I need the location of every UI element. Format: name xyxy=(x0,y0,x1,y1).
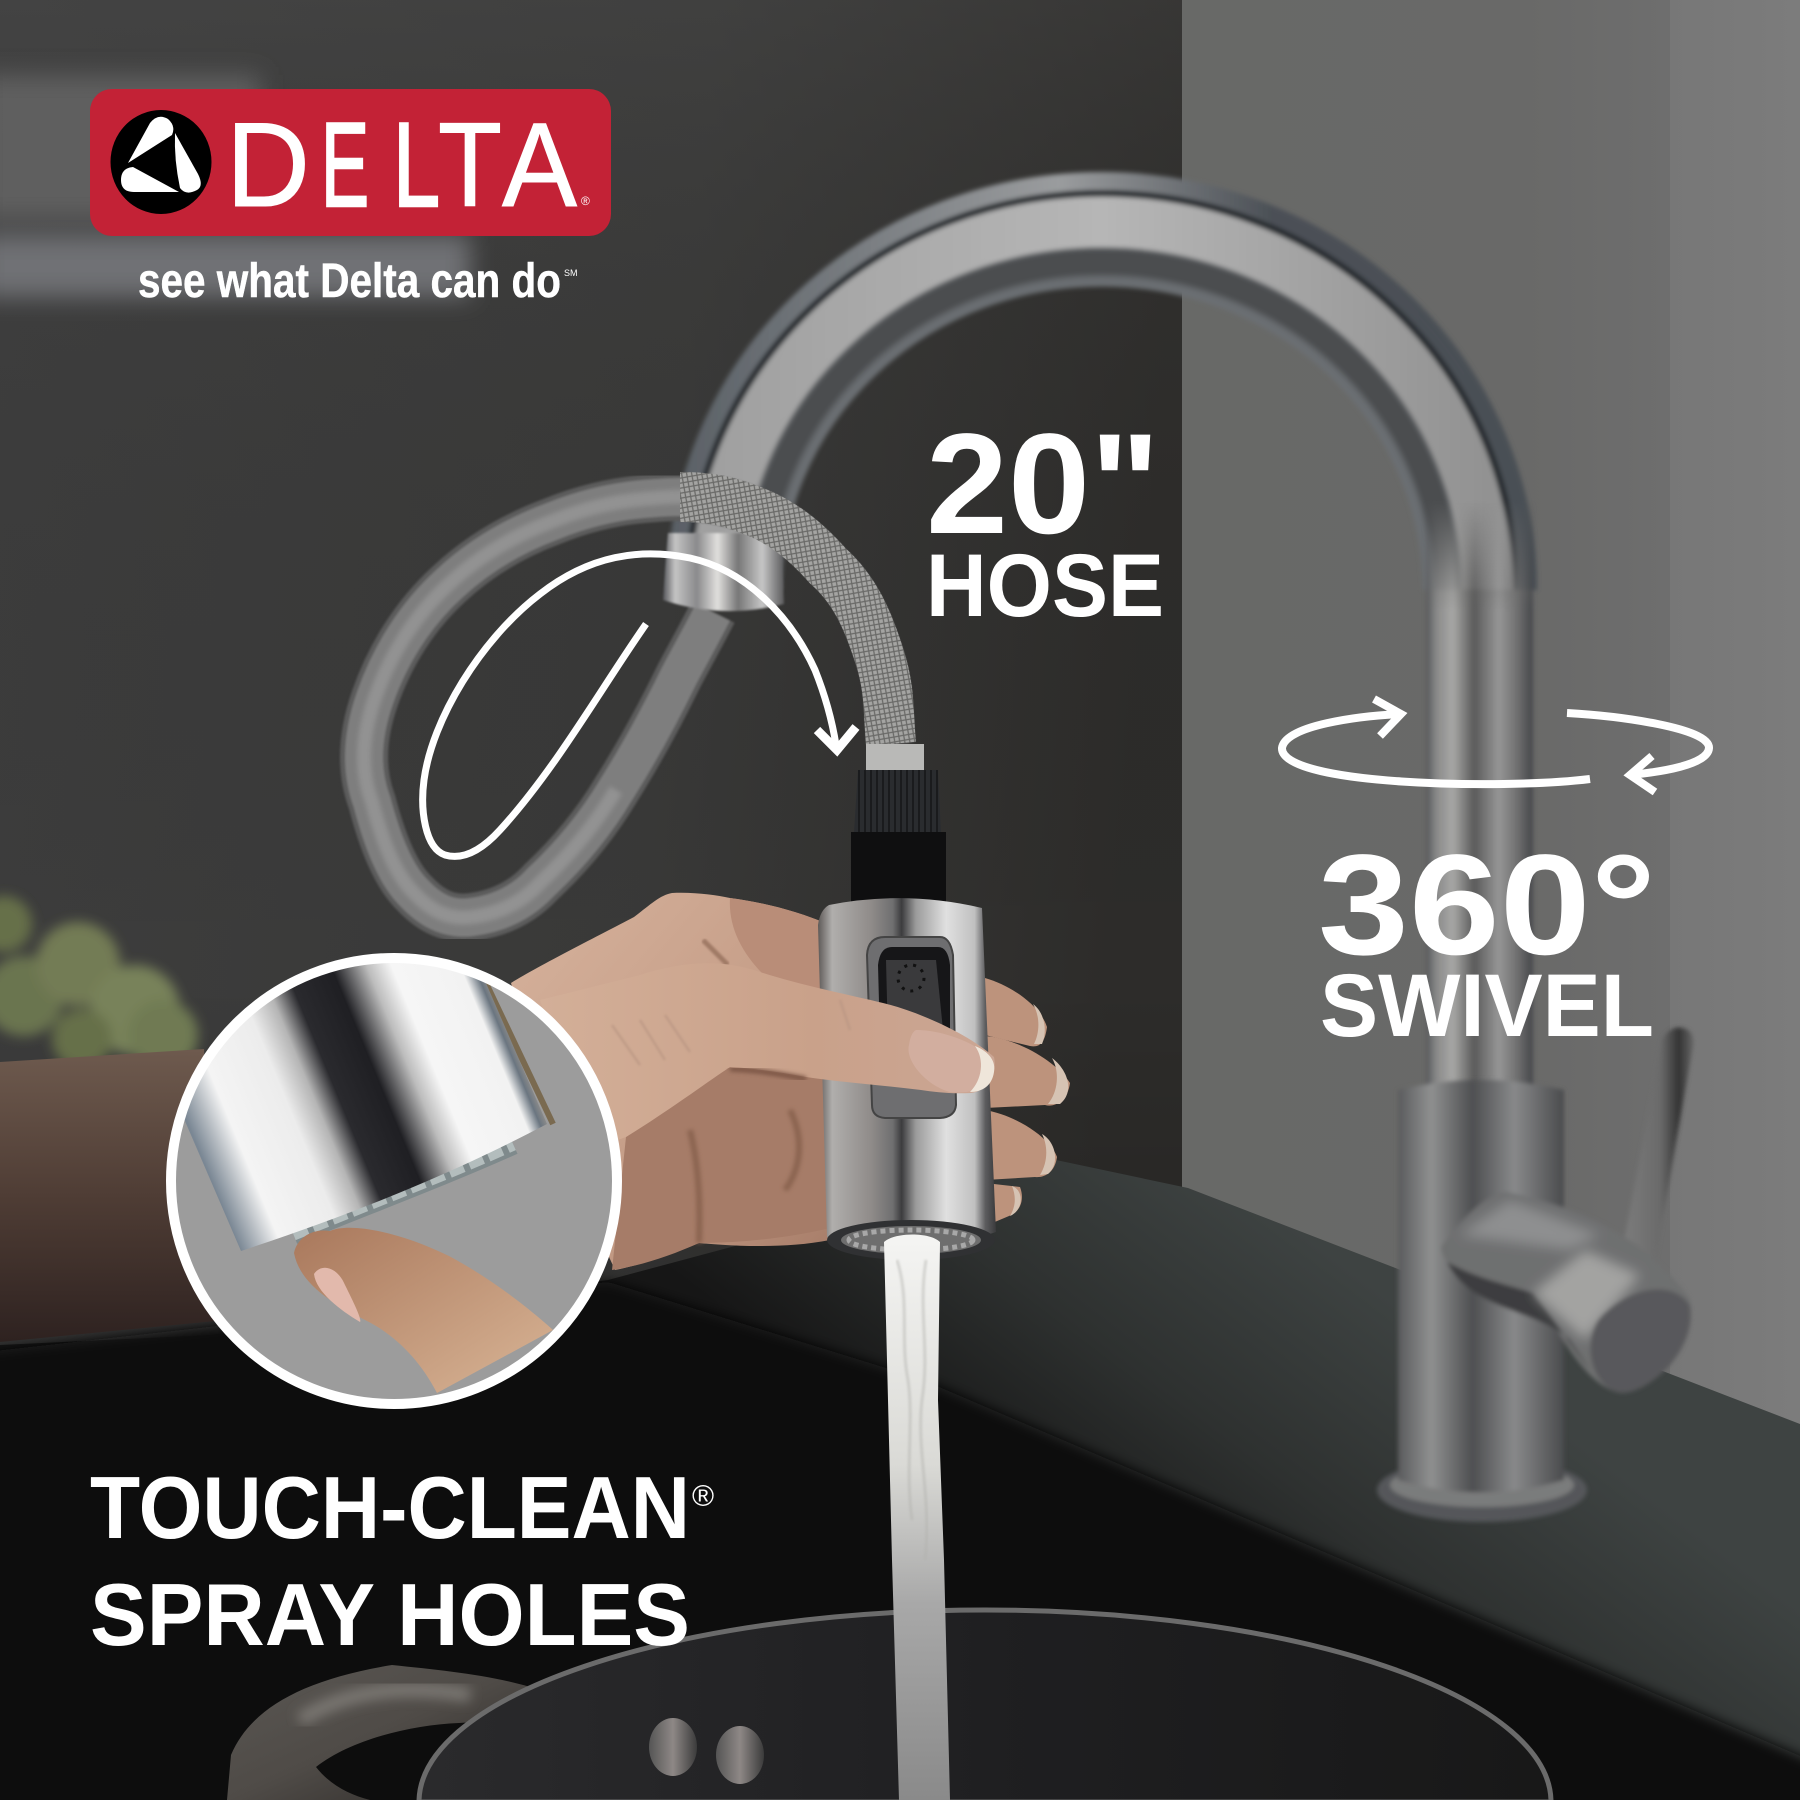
faucet base and handle xyxy=(1377,1028,1693,1522)
handle body xyxy=(1441,1192,1690,1393)
pot xyxy=(227,1610,1551,1800)
faucet column xyxy=(1426,500,1533,1100)
handle top highlights xyxy=(1460,1200,1600,1250)
20 inch hose label xyxy=(926,405,1164,635)
black badge xyxy=(110,110,212,214)
spout end cap xyxy=(663,533,784,611)
faucet gooseneck spout xyxy=(676,181,1528,590)
Touch-Clean spray holes label: ® xyxy=(692,1480,714,1513)
Touch-Clean spray holes label: SPRAY HOLES xyxy=(90,1565,690,1664)
thumb shadow xyxy=(730,1069,806,1079)
arm xyxy=(0,1049,215,1342)
Delta logo xyxy=(90,89,611,236)
handle light facet xyxy=(1533,1250,1640,1340)
Touch-Clean spray holes label xyxy=(90,1458,714,1664)
wordmark: T xyxy=(438,98,502,232)
tagline: SM xyxy=(564,268,578,278)
hand behind spray head xyxy=(511,893,1070,1270)
spray button dots xyxy=(898,965,924,991)
red logo plate xyxy=(90,89,611,236)
hose connector and spray head xyxy=(818,744,996,1260)
registered mark: ® xyxy=(581,194,590,208)
fingertip xyxy=(294,1228,553,1393)
20 inch hose label: 20" xyxy=(926,405,1160,564)
brown edge strip xyxy=(486,983,553,1124)
360 swivel label: 360° xyxy=(1318,826,1656,985)
base flange xyxy=(1377,1458,1587,1522)
360 swivel label: SWIVEL xyxy=(1320,955,1654,1055)
lower palm xyxy=(612,1067,830,1270)
tagline: see what Delta can do xyxy=(138,255,561,308)
knuckle creases xyxy=(612,1000,850,1065)
handle lever xyxy=(1621,1028,1693,1262)
360 swivel arrows xyxy=(1282,699,1709,792)
spray hole comb xyxy=(294,1146,514,1236)
handle cap xyxy=(1591,1289,1691,1393)
three-drop triangle mark xyxy=(121,117,201,193)
chrome spray body xyxy=(818,898,996,1248)
braided hose section xyxy=(680,497,891,744)
spray button key xyxy=(886,960,944,1040)
spray button recess xyxy=(878,947,950,1040)
pot rim and body xyxy=(419,1610,1551,1800)
thumbnail xyxy=(908,1030,994,1093)
spray button frame xyxy=(867,937,956,1118)
aerator xyxy=(827,1220,995,1260)
pot handle xyxy=(227,1665,530,1800)
ribbed black nut xyxy=(854,770,941,832)
Touch-Clean spray holes label: TOUCH-CLEAN xyxy=(90,1458,690,1557)
wordmark: L xyxy=(393,98,440,232)
wordmark: E xyxy=(321,98,369,232)
pot rivets xyxy=(649,1718,764,1784)
black lower collar xyxy=(851,832,946,915)
thumbnail tip xyxy=(970,1046,994,1092)
inset border xyxy=(171,958,617,1404)
wordmark: A xyxy=(502,98,577,232)
magnified touch-clean inset xyxy=(150,954,617,1404)
index knuckle xyxy=(730,898,830,990)
back of hand xyxy=(511,893,830,1270)
grapes in background xyxy=(0,896,198,1070)
hose full loop xyxy=(364,497,891,918)
base cylinder xyxy=(1398,1080,1564,1492)
20 inch hose label: HOSE xyxy=(926,535,1164,635)
water stream xyxy=(884,1234,950,1800)
chrome sprayer close-up xyxy=(184,963,547,1251)
hose routing arrow xyxy=(423,554,856,856)
silver ring xyxy=(866,744,924,770)
finger nail xyxy=(314,1268,360,1322)
360 swivel label xyxy=(1318,826,1656,1055)
thumb over spray head xyxy=(540,963,995,1150)
handle shadow band xyxy=(1447,1262,1590,1370)
wordmark xyxy=(226,98,577,232)
fingernails xyxy=(1010,1004,1068,1216)
fingers behind body xyxy=(985,978,1070,1224)
wordmark: D xyxy=(226,98,310,232)
